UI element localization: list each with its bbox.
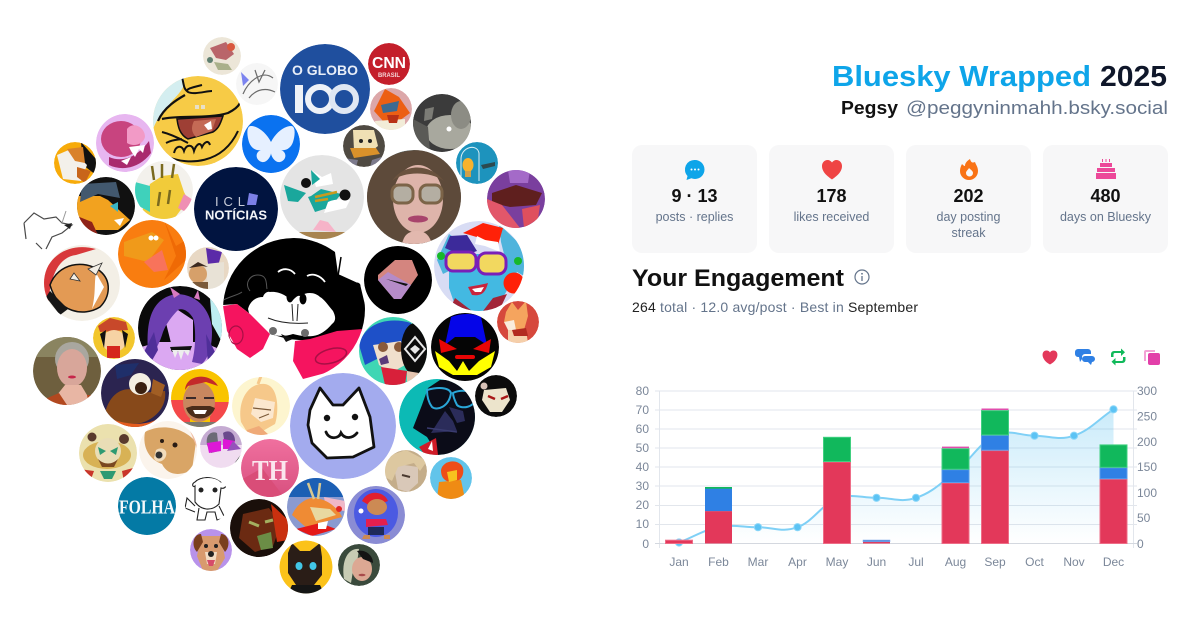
avatar bubble cluster <box>22 37 545 594</box>
month axis labels: Jul <box>908 555 924 569</box>
avatar: CNN Brasil: BRASIL <box>378 73 400 79</box>
avatar: santa puppy <box>347 486 405 544</box>
left axis labels: 70 <box>636 403 649 417</box>
stat label: likes received <box>794 210 869 224</box>
stat card: likes <box>769 145 894 253</box>
avatar: purple red creature <box>487 170 545 228</box>
avatar: dark green red beast <box>230 499 288 557</box>
bar: Jan <box>666 540 692 544</box>
avatar: TH logo: TH <box>252 455 288 487</box>
stat value: 178 <box>816 186 847 206</box>
title: 2025 <box>1100 61 1167 93</box>
month axis labels: Aug <box>945 555 966 569</box>
avatar: black cat yellow bg <box>280 540 332 594</box>
grid lines <box>655 391 1137 548</box>
user name and handle: @peggyninmahh.bsky.social <box>906 97 1168 118</box>
avatar: orange dragon <box>118 220 186 288</box>
avatar: blue wolf headphones <box>359 317 429 385</box>
left axis labels: 30 <box>636 479 649 493</box>
avatar: kid with hat <box>93 317 135 359</box>
avatar: sketch dog <box>184 477 226 521</box>
avatar: ICL Noticias: ICL <box>215 194 245 209</box>
avatar: O Globo 100: O GLOBO <box>292 63 358 78</box>
icon: legend reposts <box>1111 348 1126 366</box>
avatar: orange fire character <box>430 457 472 499</box>
avatar: brown dog purple bg <box>190 529 232 571</box>
avatar: ICL Noticias: NOTÍCIAS <box>205 208 267 222</box>
bar: Sep <box>982 408 1008 544</box>
avatar: lightbulb teal <box>456 142 498 184</box>
left axis labels: 50 <box>636 441 649 455</box>
chart: monthly engagement <box>636 384 1157 569</box>
avatar: woman with glasses photo <box>367 150 461 244</box>
avatar: Folha logo: FOLHA <box>119 496 175 518</box>
avatar: O Globo 100 <box>280 44 370 134</box>
avatar: reindeer fox <box>287 478 345 536</box>
avatar: yellow drip creature <box>135 161 193 219</box>
stat label: posts · replies <box>656 210 733 224</box>
stat label: day posting <box>937 210 1001 224</box>
avatar: devil face <box>431 313 499 381</box>
stat card: days on Bluesky <box>1043 145 1168 253</box>
bar: Aug <box>942 447 969 544</box>
avatar: duck cartoon <box>343 125 385 167</box>
avatar: gradient diamond <box>364 246 432 314</box>
left axis labels: 40 <box>636 460 649 474</box>
avatar: white sketch <box>236 63 278 105</box>
avatar: ICL Noticias <box>194 167 278 251</box>
avatar: orange fox small <box>54 142 96 184</box>
stacked bars <box>666 408 1127 544</box>
month axis labels: Nov <box>1063 555 1085 569</box>
cumulative points <box>675 406 1117 546</box>
right axis labels: 0 <box>1137 537 1144 551</box>
cumulative line <box>679 409 1114 542</box>
left axis labels: 0 <box>642 537 649 551</box>
icon: chat bubble <box>685 160 704 180</box>
stat label second line: streak <box>951 226 986 240</box>
stat card: posts and replies <box>632 145 757 253</box>
bar: May <box>824 437 850 544</box>
avatar: big black and white cartoon <box>223 238 365 380</box>
avatar: duo small <box>187 247 229 289</box>
avatar: wolf sketch <box>23 210 74 250</box>
avatar: white cat <box>290 373 396 479</box>
avatar: blonde hair anime <box>385 450 427 492</box>
left axis labels: 60 <box>636 422 649 436</box>
left axis labels: 80 <box>636 384 649 398</box>
icon: legend quotes <box>1144 350 1160 365</box>
avatar: woman with two-tone hair <box>338 544 380 586</box>
avatar: gray hippo <box>413 94 474 152</box>
month axis labels: Jun <box>867 555 886 569</box>
left axis labels: 20 <box>636 498 649 512</box>
avatar: fat orange creature with red bg <box>44 245 120 321</box>
avatar: blue dragon with glasses <box>434 221 524 311</box>
icon: info <box>855 270 869 284</box>
avatar: teal wolf <box>280 155 364 239</box>
month axis labels: Jan <box>669 555 689 569</box>
avatar: older woman photo <box>33 337 101 405</box>
left axis labels: 10 <box>636 517 649 531</box>
avatar: TH logo <box>241 439 299 497</box>
month axis labels <box>669 555 1124 569</box>
stat card: streak <box>906 145 1031 253</box>
avatar: purple goggles <box>200 426 242 468</box>
avatar: man with red cap <box>171 369 229 427</box>
avatar: pink creature <box>96 114 154 172</box>
avatar: red fox <box>497 301 539 343</box>
left axis labels <box>636 384 649 551</box>
right axis labels: 300 <box>1137 384 1157 398</box>
avatar: bluesky butterfly <box>242 115 300 173</box>
icon: heart <box>822 160 842 180</box>
avatar: dark orange dragon <box>77 177 135 235</box>
stat value: 9 · 13 <box>671 186 718 206</box>
avatar: vader with glasses <box>399 379 477 455</box>
avatar: Folha logo <box>118 477 176 535</box>
right axis labels: 200 <box>1137 435 1157 449</box>
avatar: purple hair girl <box>138 286 222 370</box>
bar: Dec <box>1100 445 1127 544</box>
icon: legend replies <box>1075 349 1095 365</box>
bar: Jun <box>863 540 890 544</box>
bar: Feb <box>705 487 732 544</box>
area under cumulative line <box>679 409 1114 544</box>
stat value: 480 <box>1090 186 1121 206</box>
right axis labels <box>1137 384 1157 551</box>
avatar: CNN Brasil <box>368 43 410 85</box>
month axis labels: Oct <box>1025 555 1044 569</box>
legend icons <box>1043 348 1160 366</box>
stat label: days on Bluesky <box>1060 210 1152 224</box>
title: Bluesky Wrapped <box>832 61 1091 93</box>
right axis labels: 250 <box>1137 410 1157 424</box>
month axis labels: Feb <box>708 555 729 569</box>
month axis labels: Mar <box>748 555 768 569</box>
stat value: 202 <box>953 186 984 206</box>
month axis labels: Dec <box>1103 555 1124 569</box>
avatar: orange cartoon <box>370 88 412 130</box>
heading: Your Engagement: Your Engagement <box>632 265 844 292</box>
avatar: golden dog photo <box>139 421 197 479</box>
right axis labels: 100 <box>1137 486 1157 500</box>
month axis labels: May <box>826 555 848 569</box>
icon: cake <box>1096 159 1116 179</box>
avatar: yellow creature <box>153 76 243 166</box>
avatar: bowser style mustache <box>79 424 137 482</box>
avatar: blonde character <box>232 376 290 435</box>
avatar: CNN Brasil: CNN <box>372 55 406 72</box>
user name and handle: Pegsy <box>841 97 899 118</box>
avatar: dark hair girl <box>475 375 517 417</box>
month axis labels: Sep <box>984 555 1006 569</box>
avatar: brown bear <box>101 359 169 427</box>
avatar: mosaic <box>203 37 241 75</box>
right axis labels: 50 <box>1137 511 1151 525</box>
icon: flame <box>960 159 978 180</box>
right axis labels: 150 <box>1137 460 1157 474</box>
engagement summary: 264 total · 12.0 avg/post · Best in September <box>632 299 918 315</box>
icon: legend heart <box>1043 350 1057 364</box>
month axis labels: Apr <box>788 555 807 569</box>
